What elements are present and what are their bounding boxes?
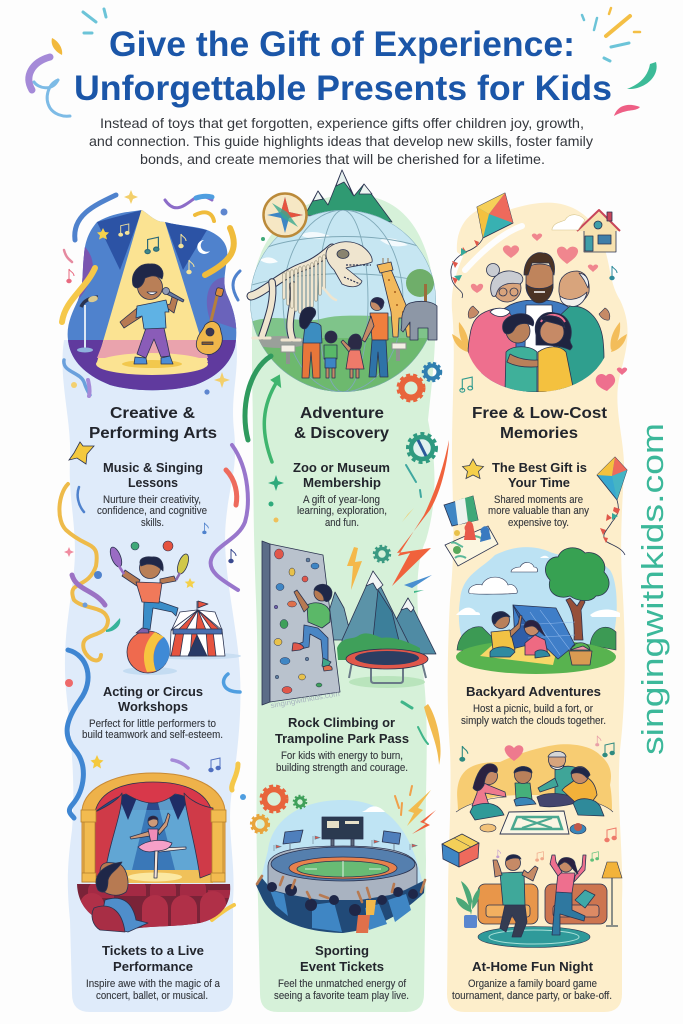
ballerina [130,813,186,878]
item: Music and Singing Lessons: Nurture their creativity, [103,494,201,506]
icon: dice cube [442,834,479,867]
girl [346,350,364,369]
item: Zoo or Museum Membership: learning, exploration, [297,505,387,517]
item: Tickets to a Live Performance: Tickets to a Live [102,943,204,958]
illustration: family dance party at home [456,855,622,948]
item: Zoo or Museum Membership [293,460,390,529]
item: Tickets to a Live Performance: concert, ballet, or musical. [96,990,208,1002]
section heading: Creative and Performing Arts: Creative & [110,405,195,422]
circus tent [170,601,225,656]
item: Music and Singing Lessons: Lessons [128,475,178,490]
singing boy [120,264,184,364]
grandpa head [559,271,589,306]
blanket [480,640,558,665]
item: Zoo or Museum Membership: A gift of year-long [303,494,380,506]
climbing holds [274,549,322,694]
illustration: family board game [442,736,622,1002]
intro paragraph: and connection. This guide highlights ideas that develop new skills, foster family [89,133,593,149]
giraffe [377,258,412,337]
panel: creative and performing arts [59,190,248,1012]
mountains behind dome [305,170,392,222]
item: The Best Gift is Your Time: The Best Gift is [492,460,587,475]
item: Rock Climbing or Trampoline Park Pass: For kids with energy to burn, [281,750,403,762]
icon: second kite [597,457,627,555]
item: At-Home Fun Night [452,959,612,1002]
item: The Best Gift is Your Time: expensive toy. [508,517,569,529]
dancing man [493,855,538,937]
game board [480,811,586,834]
father [480,300,600,392]
illustration: ballet on a theatre stage [75,773,232,934]
item: Music and Singing Lessons: Music & Singing [103,460,203,475]
panel: adventure and discovery [245,170,449,1012]
section heading: Free and Low-Cost Memories: Memories [500,425,578,442]
item: Rock Climbing or Trampoline Park Pass: Trampoline Park Pass [275,731,409,746]
illustration: backyard picnic with fort [456,547,620,674]
climbing boy [292,584,332,671]
t-rex skeleton [251,248,336,340]
item: Zoo or Museum Membership: and fun. [325,517,359,529]
intro paragraph: Instead of toys that get forgotten, experience gifts offer children joy, growth, [100,115,584,131]
item: Music and Singing Lessons [97,460,207,529]
item: At-Home Fun Night: tournament, dance party, or bake-off. [452,990,612,1002]
guitar [196,287,224,354]
intro paragraph [89,115,593,167]
music notes around family [460,736,616,861]
gold columns [81,810,226,882]
sofas [478,884,607,924]
panel: free and low-cost memories [442,193,670,1012]
title [74,25,612,108]
item: Rock Climbing or Trampoline Park Pass: building strength and courage. [276,762,408,774]
item: Backyard Adventures: Backyard Adventures [466,684,601,699]
picnic basket [569,643,592,665]
item: Sporting Event Tickets: Sporting [315,943,369,958]
decorative sparkles beside Adventure text [261,237,421,522]
illustration: climbing wall, mountains and trampoline [262,541,436,710]
mother [302,342,320,378]
section heading: Free and Low-Cost Memories [472,405,608,442]
decorative swooshes beside Rock Climbing [402,702,441,765]
stage arch [82,773,225,882]
hearts [471,233,627,391]
item: Tickets to a Live Performance [86,943,221,1002]
item: Backyard Adventures [461,684,606,727]
grandma head [486,264,523,302]
compass icon [264,194,306,236]
seated child from behind [92,862,148,932]
dancing woman [550,855,586,935]
item: The Best Gift is Your Time [488,460,589,529]
mic stand [77,295,99,352]
item: Acting or Circus Workshops [82,684,223,741]
scoreboard and floodlights [283,817,401,851]
icon: board game pieces [444,496,498,566]
item: Acting or Circus Workshops: build teamwork and self-esteem. [82,729,223,741]
item heading: Adventure and Discovery [294,405,389,442]
audience seats [77,884,230,929]
item: At-Home Fun Night: Organize a family board game [468,978,597,990]
boy [324,345,337,359]
lightning sparks [395,786,436,834]
illustration: family group hug [451,193,627,392]
section heading: Free and Low-Cost Memories: Free & Low-Cost [472,405,608,422]
item heading: Adventure and Discovery: Adventure [300,405,384,422]
decorative stars, dots and notes in blue panel [64,190,246,800]
arrows: green swoosh [245,356,280,462]
item: The Best Gift is Your Time: more valuable than any [488,505,589,517]
grandma [468,308,516,392]
cloud [552,215,585,230]
title: Unforgettable Presents for Kids [74,69,612,108]
item: Acting or Circus Workshops: Workshops [118,699,188,714]
item: At-Home Fun Night: At-Home Fun Night [472,959,594,974]
photo watermark: singingwithkids.com [270,689,340,710]
illustration: dinosaur skeleton under museum dome [250,170,437,392]
item: The Best Gift is Your Time: Shared moments are [494,494,583,506]
arrow: orange-red lightning bolt [392,440,449,593]
plant [456,881,480,928]
vertical site watermark: singingwithkids.com [635,423,670,755]
blue fort tent [500,605,575,659]
item: Rock Climbing or Trampoline Park Pass [275,715,409,774]
section heading: Creative and Performing Arts: Performing Arts [89,425,217,442]
boy hugging [502,313,538,392]
item: Sporting Event Tickets: Event Tickets [300,959,384,974]
mountains [320,571,436,654]
floor lamp [602,862,622,926]
item: The Best Gift is Your Time: Your Time [508,475,570,490]
item: Backyard Adventures: Host a picnic, build a fort, or [473,703,593,715]
intro paragraph: bonds, and create memories that will be cherished for a lifetime. [140,151,545,167]
header confetti [29,8,657,116]
item: Sporting Event Tickets [274,943,409,1002]
grandpa [555,306,604,392]
juggling clubs [108,546,191,580]
stadium bowl [268,846,417,908]
exhibit plaques [281,343,406,364]
tree [545,548,609,640]
item: Music and Singing Lessons: skills. [141,517,164,529]
trampoline [346,649,428,688]
father [370,313,388,340]
section heading: Creative and Performing Arts [89,405,217,442]
title: Give the Gift of Experience: [109,25,575,64]
bushes [457,627,500,652]
grandparent hands on shoulders [468,306,610,320]
item heading: Adventure and Discovery: & Discovery [294,425,389,442]
item: Sporting Event Tickets: Feel the unmatched energy of [278,978,407,990]
gears above stadium [251,786,306,833]
item: Zoo or Museum Membership: Membership [303,475,381,490]
grass [456,640,616,674]
rock wall [262,541,340,705]
picnic kids [490,612,550,658]
tree [406,269,434,297]
adults and children around the board [470,751,604,820]
father head [524,253,555,303]
illustration: child singing in spotlight [68,210,236,390]
item: Zoo or Museum Membership: Zoo or Museum [293,460,390,475]
item: Backyard Adventures: simply watch the clouds together. [461,715,606,727]
item: Rock Climbing or Trampoline Park Pass: Rock Climbing or [288,715,395,730]
icon: gears [398,363,441,462]
crowd [256,876,425,933]
illustration: stadium with cheering crowd [251,786,436,933]
elephant [401,301,437,340]
house icon [577,210,620,252]
icon: star [462,459,484,478]
striped ball [127,631,170,673]
girl hugging [535,312,574,392]
item: Tickets to a Live Performance: Performance [113,959,193,974]
item: Acting or Circus Workshops: Perfect for little performers to [89,718,216,730]
kite icon with bows [451,193,513,298]
family looking at exhibit [299,298,388,378]
item: Tickets to a Live Performance: Inspire awe with the magic of a [86,978,221,990]
juggling boy [122,557,178,633]
clouds [469,562,538,594]
decorative ribbons around singer [59,195,248,920]
red curtains [95,782,213,878]
illustration: juggling boy with big top tent [106,541,241,675]
item: Music and Singing Lessons: confidence, and cognitive [97,505,207,517]
item: Sporting Event Tickets: seeing a favorite team play live. [274,990,409,1002]
item: Acting or Circus Workshops: Acting or Circus [103,684,203,699]
